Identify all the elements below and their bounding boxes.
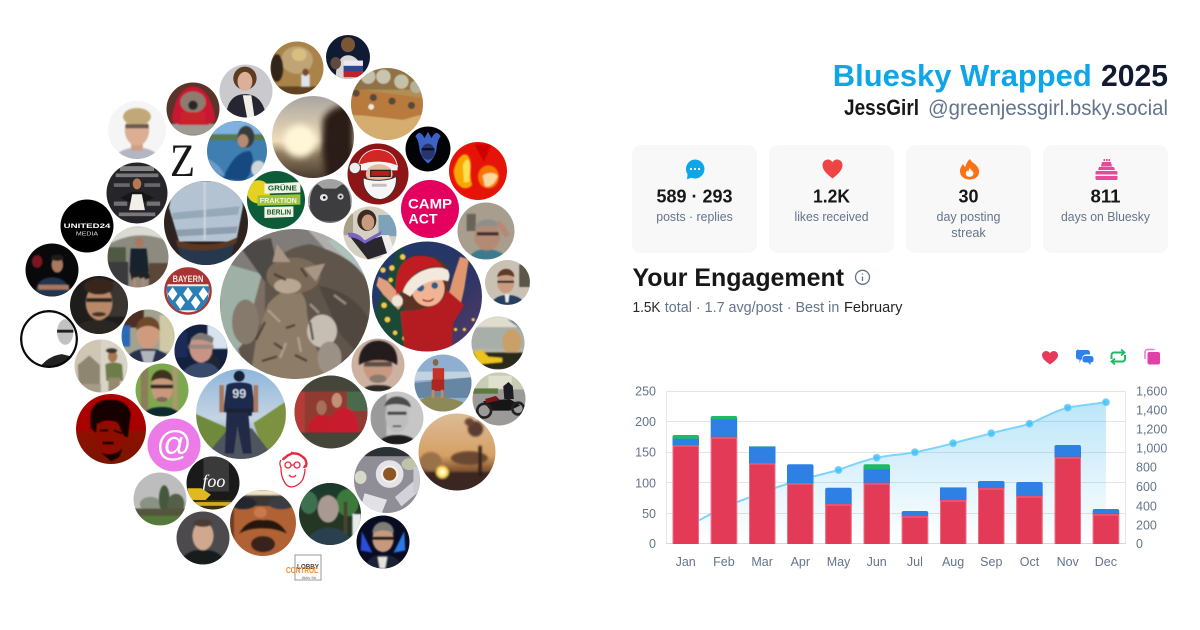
avatar: cartoon Santa with sunglasses	[348, 144, 408, 204]
panel: likes received card: 1.2K	[813, 186, 851, 206]
avatar: woman on lake	[207, 121, 267, 181]
avatar: man walking on road, number 99: 99	[232, 387, 246, 401]
right axis labels	[1136, 384, 1167, 551]
user name and handle: @greenjessgirl.bsky.social	[928, 96, 1168, 120]
avatar: man with glasses, blue stage lights	[356, 516, 410, 568]
avatar: red and yellow abstract	[449, 142, 507, 200]
green repost bar segments	[672, 416, 966, 489]
avatar: at-sign logo on pink	[148, 418, 200, 472]
panel: days on Bluesky card: days on Bluesky	[1061, 209, 1150, 224]
avatar: striped shirt torso	[164, 181, 248, 265]
month labels: Mar	[751, 555, 773, 569]
left axis labels: 150	[635, 446, 656, 460]
avatar: LobbyControl logo: CONTROL	[286, 566, 318, 575]
left axis labels	[635, 384, 656, 551]
chart: monthly engagement bars with cumulative line	[635, 384, 1167, 569]
avatar: gold ornament room	[270, 42, 324, 94]
avatar: man with grey glasses in blue seat	[174, 324, 228, 378]
avatar: black and white portrait with ring	[20, 310, 78, 368]
avatar: teacup on grey blanket	[354, 447, 420, 513]
avatar: blue jester mask	[406, 126, 450, 172]
right axis labels: 1,200	[1136, 422, 1167, 436]
avatar: man walking on road, number 99	[196, 369, 286, 459]
avatar: LobbyControl logo: LOBBY	[297, 564, 319, 571]
month labels: Sep	[980, 555, 1002, 569]
chart grid and axes	[666, 392, 1126, 544]
avatar: older man in black turtleneck	[176, 512, 230, 564]
month labels: Apr	[791, 555, 810, 569]
avatar: man with glasses, blond	[108, 101, 166, 159]
month labels: Aug	[942, 555, 964, 569]
icon: chat bubble	[686, 160, 704, 179]
month labels: Jun	[867, 555, 887, 569]
avatar: sepia composite, man in green polo	[74, 340, 128, 392]
avatar: motorcyclist on street	[472, 372, 526, 426]
cumulative line points	[835, 399, 1109, 474]
engagement summary text	[632, 300, 903, 316]
right axis labels: 200	[1136, 518, 1157, 532]
avatar: man in suit on TV	[122, 310, 174, 362]
engagement summary text: total · 1.7 avg/post · Best in	[665, 300, 839, 316]
icon: reposts arrows	[1112, 350, 1125, 364]
engagement summary text: February	[844, 300, 903, 316]
panel: posts and replies card: 589 · 293	[656, 186, 732, 206]
panel: posts and replies card: posts · replies	[656, 209, 733, 224]
avatar: blonde woman by the sea	[472, 316, 524, 370]
month labels: Oct	[1020, 555, 1040, 569]
avatar: at-sign logo on pink: @	[156, 425, 192, 464]
avatar: Bayern Munich crest: BAYERN	[173, 274, 203, 285]
panel: posts and replies card	[632, 145, 757, 253]
avatar: man with cap and glasses	[458, 202, 514, 260]
panel: day posting streak card: streak	[951, 225, 986, 240]
avatar: man with slide deck, dark	[106, 162, 168, 224]
engagement summary text: 1.5K	[632, 300, 661, 316]
avatar: large fluffy cat photo	[220, 229, 370, 379]
avatar: large letter Z logo: Z	[170, 135, 195, 187]
avatar: backlit sunset with sun flare	[272, 96, 354, 178]
month labels: Dec	[1095, 555, 1117, 569]
title: Bluesky Wrapped	[833, 58, 1092, 93]
avatar: man with glasses in forest	[136, 364, 188, 416]
avatar: woman reading a book	[344, 206, 396, 260]
icon: likes heart	[1042, 351, 1058, 364]
panel: likes received card: likes received	[794, 209, 868, 224]
icon: birthday cake	[1096, 159, 1118, 180]
right axis labels: 1,600	[1136, 384, 1167, 398]
red like bar segments	[672, 437, 1119, 544]
avatar: red hooded koala	[166, 82, 220, 136]
month labels: Jan	[676, 555, 696, 569]
avatar: red sketched face doodle	[280, 453, 306, 487]
avatar: green party Berlin logo: FRAKTION	[260, 198, 297, 205]
avatar: bass guitar headstock	[351, 68, 423, 140]
avatar: FC Bayern players celebrating	[294, 376, 368, 448]
bar highlight edges	[673, 438, 1119, 544]
avatar: LobbyControl logo	[286, 555, 321, 580]
avatar: cartoon girl in Santa hat	[361, 242, 482, 352]
avatar: man in dark blue t-shirt	[26, 244, 78, 296]
avatar: UNITED24 media logo	[60, 200, 114, 252]
icon: quotes squares	[1145, 350, 1160, 364]
right axis labels: 800	[1136, 460, 1157, 474]
avatar: man in black beanie	[352, 338, 404, 392]
heading: Your Engagement: Your Engagement	[632, 264, 845, 292]
cumulative area	[686, 402, 1106, 544]
avatar: UNITED24 media logo: UNITED24	[64, 223, 111, 230]
avatar: man looking stern, black and white	[370, 392, 424, 444]
avatar: red stencil portrait	[76, 394, 146, 464]
icon: replies bubbles	[1076, 350, 1094, 365]
avatar: older man, blue suit	[485, 260, 530, 305]
blue reply bar segments	[672, 419, 1119, 516]
avatar: foo logo with yellow band	[186, 456, 240, 510]
avatar: green party Berlin logo	[247, 171, 305, 229]
avatar: green party Berlin logo: BERLIN	[267, 208, 291, 217]
avatar: bear with Russian flag	[326, 35, 370, 79]
left axis labels: 50	[642, 507, 656, 521]
right axis labels: 1,000	[1136, 442, 1167, 456]
cumulative line	[686, 402, 1106, 527]
chart legend icons	[1042, 350, 1160, 365]
right axis labels: 0	[1136, 537, 1143, 551]
avatar: grey cat face	[308, 179, 352, 223]
panel: likes received card	[769, 145, 894, 253]
avatar: foo logo with yellow band: foo	[202, 471, 225, 491]
panel: avatar cluster	[20, 35, 530, 580]
left axis labels: 250	[635, 384, 656, 398]
left axis labels: 100	[635, 476, 656, 490]
avatar: mustached man with sunglasses	[230, 490, 296, 556]
right axis labels: 1,400	[1136, 404, 1167, 418]
avatar: LobbyControl logo: Aktiv für	[302, 575, 317, 580]
panel: day posting streak card: 30	[958, 186, 978, 206]
icon: info	[856, 270, 870, 284]
panel: day posting streak card: day posting	[936, 209, 1000, 224]
title: 2025	[1101, 58, 1168, 93]
avatar: Campact logo: CAMP	[408, 195, 452, 211]
icon: heart	[822, 160, 842, 178]
month labels: Nov	[1057, 555, 1080, 569]
left axis labels: 0	[649, 537, 656, 551]
icon: flame	[960, 159, 979, 180]
avatar: man on terrace with sunglasses	[108, 226, 168, 288]
avatar: Campact logo: ACT	[409, 210, 438, 227]
right axis labels: 600	[1136, 480, 1157, 494]
right axis labels: 400	[1136, 500, 1157, 514]
avatar: man with glasses, dark hair, beard	[70, 276, 128, 334]
avatar: sunset with chimney smoke	[418, 414, 496, 490]
avatar: man hiking on mountain	[414, 354, 472, 412]
avatar: Bayern Munich crest	[164, 267, 212, 315]
panel: days on Bluesky card	[1043, 145, 1168, 253]
avatar: UNITED24 media logo: MEDIA	[76, 232, 98, 238]
avatar: woman in black blazer	[220, 64, 272, 118]
panel: days on Bluesky card: 811	[1090, 186, 1120, 206]
avatar: rainy landscape with trees	[134, 472, 186, 526]
month labels	[676, 555, 1117, 569]
month labels: Feb	[713, 555, 735, 569]
user name and handle: JessGirl	[844, 95, 919, 120]
month labels: May	[827, 555, 851, 569]
avatar: Campact logo	[401, 180, 459, 238]
avatar: green party Berlin logo: GRÜNE	[268, 184, 297, 193]
panel: day posting streak card	[906, 145, 1031, 253]
left axis labels: 200	[635, 415, 656, 429]
user name and handle	[844, 95, 1168, 120]
month labels: Jul	[907, 555, 923, 569]
avatar: man's back, palm trees	[299, 483, 361, 545]
